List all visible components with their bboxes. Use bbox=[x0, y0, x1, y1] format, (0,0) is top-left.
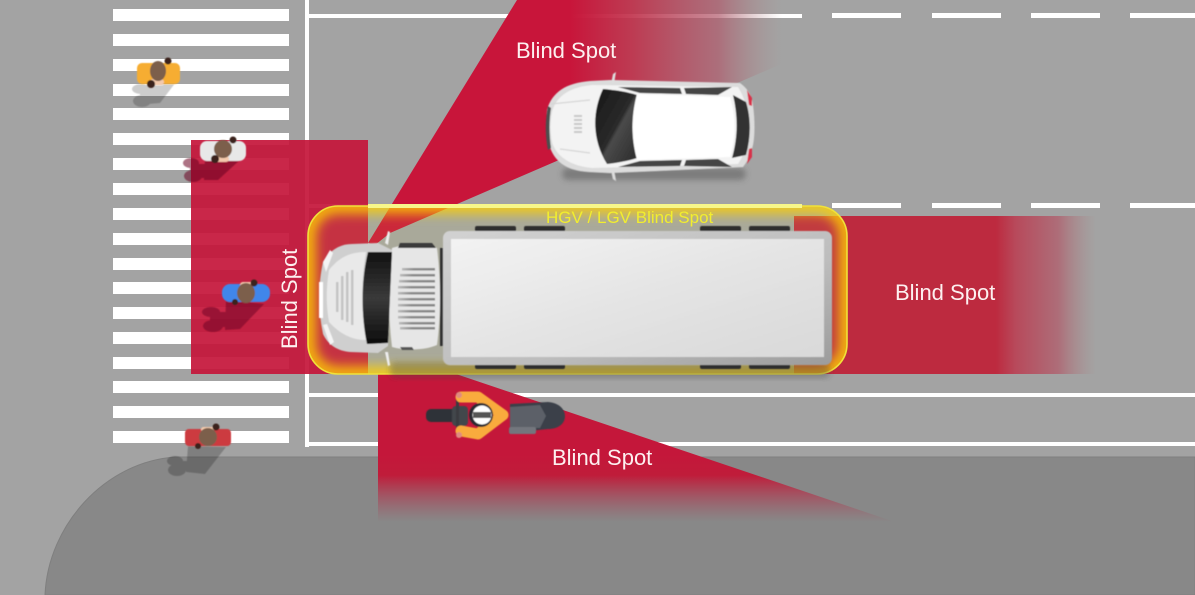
label: HGV / LGV blind spot: HGV / LGV Blind Spot bbox=[546, 208, 714, 227]
blind spot zone: near-side cone bbox=[368, 0, 790, 245]
windscreen bbox=[363, 252, 392, 344]
pedestrian: red shirt bbox=[167, 424, 231, 476]
cab nose bbox=[319, 243, 392, 353]
car bbox=[546, 72, 754, 181]
truck shadow bbox=[390, 362, 830, 378]
pedestrian crossing stripes bbox=[113, 9, 289, 443]
label: blind spot, near side: Blind Spot bbox=[516, 38, 616, 63]
label: blind spot, off side: Blind Spot bbox=[552, 445, 652, 470]
trailer box bbox=[443, 231, 832, 365]
blind spot zone: front bbox=[191, 140, 368, 374]
pedestrian: blue shirt bbox=[202, 280, 270, 332]
wing mirrors bbox=[385, 231, 390, 245]
blind spot zone: off-side cone bbox=[378, 374, 895, 522]
pavement with curved kerb bbox=[45, 457, 1195, 595]
pedestrian: white shirt bbox=[183, 136, 246, 182]
cab louvres bbox=[398, 268, 435, 330]
cab engine section bbox=[389, 244, 440, 349]
blind spot zone: rear bbox=[794, 216, 1100, 374]
road markings bbox=[305, 0, 1195, 447]
truck bbox=[319, 226, 832, 378]
label: blind spot, front: Blind Spot bbox=[277, 249, 302, 349]
pedestrian: orange shirt bbox=[132, 58, 180, 107]
label: blind spot, rear: Blind Spot bbox=[895, 280, 995, 305]
motorcycle with rider bbox=[426, 392, 565, 438]
HGV / LGV blind spot highlight bbox=[308, 204, 847, 374]
trailer wheels bbox=[475, 226, 790, 369]
